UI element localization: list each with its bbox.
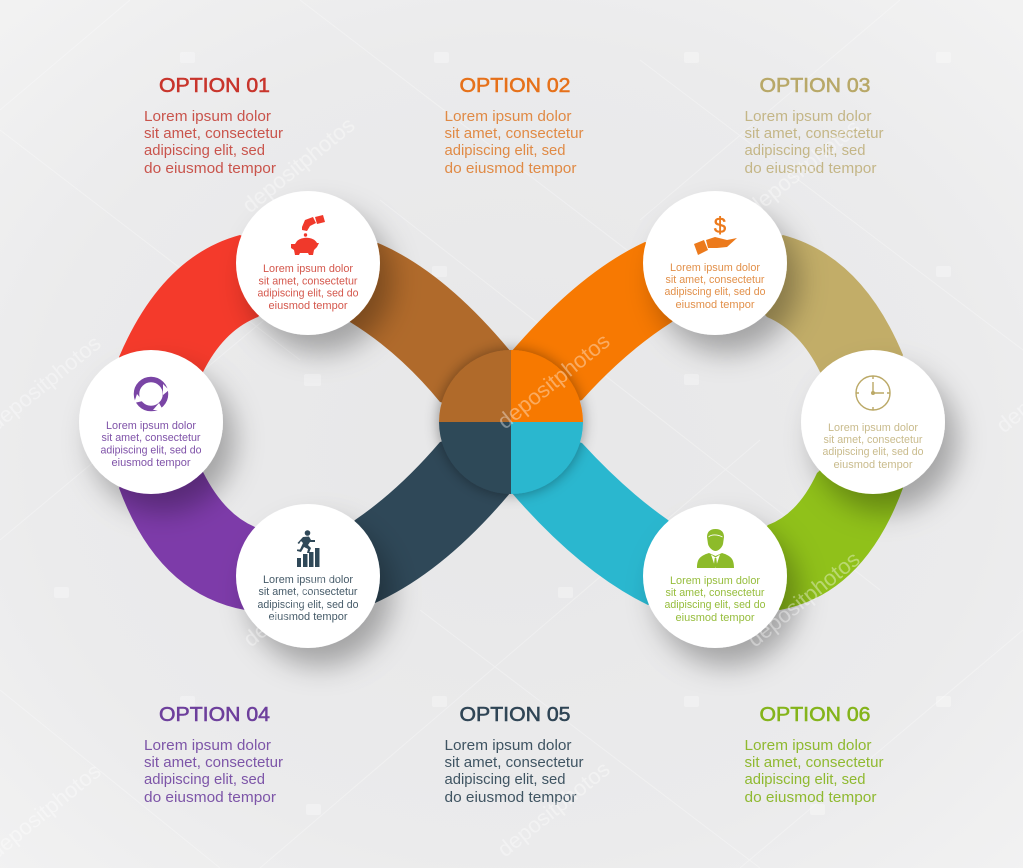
option 02 bbox=[444, 75, 584, 177]
option 06 bbox=[744, 704, 884, 806]
caption: eiusmod tempor bbox=[268, 611, 348, 623]
option 01: sit amet, consectetur bbox=[144, 125, 283, 142]
band: tan bbox=[715, 235, 903, 422]
icon: clock bbox=[856, 376, 890, 410]
option 03: OPTION 03 bbox=[760, 75, 870, 97]
option 04 bbox=[144, 704, 283, 806]
option 05: sit amet, consectetur bbox=[444, 754, 584, 771]
caption: eiusmod tempor bbox=[268, 300, 348, 312]
option 03: Lorem ipsum dolor bbox=[744, 108, 872, 125]
option 01: Lorem ipsum dolor bbox=[144, 108, 271, 125]
option 01: OPTION 01 bbox=[159, 75, 270, 97]
option 03: adipiscing elit, sed bbox=[744, 142, 866, 159]
option 05: Lorem ipsum dolor bbox=[444, 737, 572, 754]
caption: eiusmod tempor bbox=[834, 459, 913, 471]
caption: sit amet, consectetur bbox=[258, 276, 358, 288]
option 02: adipiscing elit, sed bbox=[444, 142, 566, 159]
option 04: sit amet, consectetur bbox=[144, 754, 283, 771]
icon: businessman bbox=[697, 529, 734, 568]
caption: adipiscing elit, sed do bbox=[100, 444, 202, 456]
option 06: adipiscing elit, sed bbox=[744, 771, 866, 788]
option 04: Lorem ipsum dolor bbox=[144, 737, 271, 754]
option 05: do eiusmod tempor bbox=[444, 789, 576, 806]
option 06: sit amet, consectetur bbox=[744, 754, 884, 771]
central four-colour hub bbox=[439, 350, 583, 494]
caption: sit amet, consectetur bbox=[102, 432, 201, 444]
caption bbox=[258, 574, 359, 623]
depositphotos watermarks: depositphotos bbox=[237, 112, 360, 218]
caption: Lorem ipsum dolor bbox=[263, 263, 353, 275]
caption bbox=[822, 422, 924, 471]
circle: bottom right bbox=[643, 504, 787, 648]
caption: eiusmod tempor bbox=[676, 299, 755, 311]
option 03: sit amet, consectetur bbox=[744, 125, 884, 142]
circle: bottom left bbox=[236, 504, 380, 648]
caption: Lorem ipsum dolor bbox=[670, 262, 760, 274]
icon: hand and piggy bank bbox=[291, 215, 325, 255]
caption bbox=[664, 575, 766, 624]
circle: top left bbox=[236, 191, 380, 335]
caption: eiusmod tempor bbox=[112, 457, 191, 469]
depositphotos watermarks: depositphotos bbox=[238, 546, 361, 652]
option 02: do eiusmod tempor bbox=[444, 160, 576, 177]
option 02: Lorem ipsum dolor bbox=[444, 108, 572, 125]
caption: sit amet, consectetur bbox=[824, 434, 923, 446]
band: red bbox=[119, 235, 308, 422]
band: green bbox=[715, 422, 903, 610]
option 01: do eiusmod tempor bbox=[144, 160, 276, 177]
option 06: OPTION 06 bbox=[760, 704, 870, 726]
option 04: OPTION 04 bbox=[159, 704, 270, 726]
camera watermark marks bbox=[54, 52, 951, 815]
band: dark slate bbox=[308, 422, 511, 603]
band: purple bbox=[119, 422, 308, 610]
depositphotos watermarks: depositphotos bbox=[492, 328, 615, 434]
option 05: adipiscing elit, sed bbox=[444, 771, 566, 788]
caption: Lorem ipsum dolor bbox=[670, 575, 760, 587]
option 04: adipiscing elit, sed bbox=[144, 771, 265, 788]
icon: runner on bars bbox=[297, 530, 320, 567]
option 05: OPTION 05 bbox=[460, 704, 570, 726]
caption: sit amet, consectetur bbox=[666, 587, 765, 599]
circle: left bbox=[79, 350, 223, 494]
option 03 bbox=[744, 75, 884, 177]
caption: adipiscing elit, sed do bbox=[664, 286, 766, 298]
depositphotos watermarks: depositphotos bbox=[742, 546, 865, 652]
circle: right bbox=[801, 350, 945, 494]
caption: Lorem ipsum dolor bbox=[106, 420, 196, 432]
option 06: Lorem ipsum dolor bbox=[744, 737, 872, 754]
option 06: do eiusmod tempor bbox=[744, 789, 876, 806]
depositphotos watermarks: depositphotos bbox=[742, 114, 865, 220]
caption: adipiscing elit, sed do bbox=[822, 446, 924, 458]
band: brown bbox=[308, 243, 511, 422]
band: teal bbox=[511, 422, 715, 605]
option 01: adipiscing elit, sed bbox=[144, 142, 265, 159]
caption bbox=[258, 263, 359, 312]
icon: hand holding dollar bbox=[694, 213, 737, 255]
option 02: sit amet, consectetur bbox=[444, 125, 584, 142]
caption bbox=[100, 420, 202, 469]
circle: top right bbox=[643, 191, 787, 335]
caption: Lorem ipsum dolor bbox=[263, 574, 353, 586]
icon: cycle arrows bbox=[134, 380, 169, 410]
depositphotos watermarks: depositphotos bbox=[492, 756, 615, 862]
caption: adipiscing elit, sed do bbox=[258, 288, 359, 300]
caption: sit amet, consectetur bbox=[666, 274, 765, 286]
caption: adipiscing elit, sed do bbox=[664, 599, 766, 611]
option 03: do eiusmod tempor bbox=[744, 160, 876, 177]
band: orange bbox=[511, 242, 715, 422]
caption: eiusmod tempor bbox=[676, 612, 755, 624]
caption: adipiscing elit, sed do bbox=[258, 599, 359, 611]
caption: sit amet, consectetur bbox=[258, 586, 358, 598]
icon: hand holding dollar: $ bbox=[714, 213, 726, 238]
option 02: OPTION 02 bbox=[460, 75, 570, 97]
option 05 bbox=[444, 704, 584, 806]
option 04: do eiusmod tempor bbox=[144, 789, 276, 806]
option 01 bbox=[144, 75, 283, 177]
caption bbox=[664, 262, 766, 311]
caption: Lorem ipsum dolor bbox=[828, 422, 918, 434]
